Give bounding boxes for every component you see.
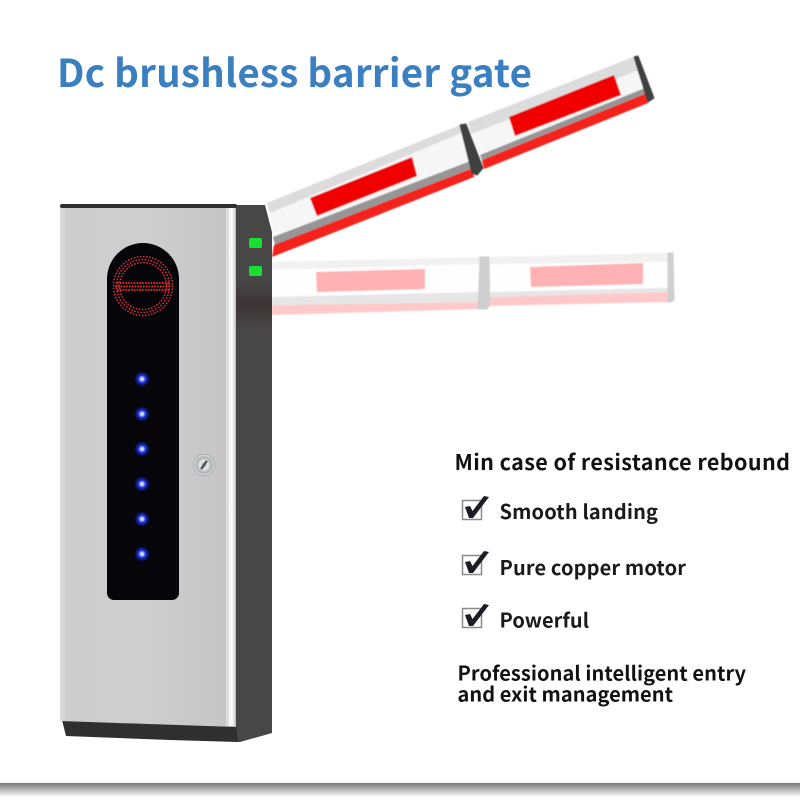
icon: checkbox bbox=[462, 604, 489, 628]
feature: powerful bbox=[462, 604, 589, 634]
bottom shadow band bbox=[0, 783, 800, 797]
feature: smooth landing: Smooth landing bbox=[500, 496, 658, 525]
door lock bbox=[194, 454, 214, 476]
cabinet front door bbox=[60, 207, 236, 727]
title: Dc brushless barrier gate bbox=[57, 43, 532, 99]
indicator lights bbox=[249, 238, 262, 276]
icon: checkbox bbox=[462, 551, 489, 574]
closing text: Professional intelligent entry bbox=[458, 658, 747, 686]
red LED no-entry display bbox=[114, 256, 172, 316]
black display panel bbox=[107, 243, 179, 600]
feature: powerful: Powerful bbox=[500, 604, 589, 634]
raised barrier arm bbox=[267, 56, 654, 257]
faded lowered barrier arm bbox=[272, 253, 674, 315]
closing text: and exit management bbox=[458, 678, 674, 708]
barrier cabinet bbox=[60, 204, 272, 742]
cabinet base bbox=[62, 720, 238, 742]
feature heading: Min case of resistance rebound bbox=[454, 446, 790, 477]
closing text bbox=[458, 658, 747, 708]
cabinet top edge bbox=[60, 204, 237, 208]
cabinet side reflection bbox=[236, 280, 272, 330]
blue status LEDs bbox=[134, 372, 150, 562]
feature: pure copper motor: Pure copper motor bbox=[500, 552, 686, 581]
icon: checkbox bbox=[462, 496, 489, 520]
cabinet side bbox=[236, 205, 272, 742]
